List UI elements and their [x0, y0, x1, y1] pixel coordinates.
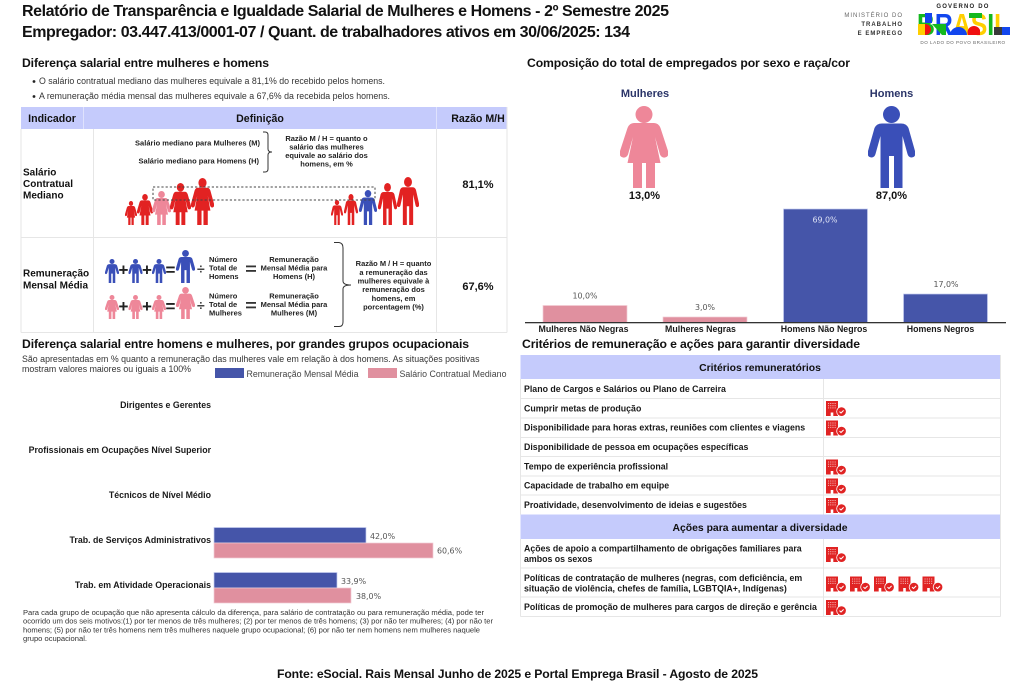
table header: Razão M/H — [451, 113, 505, 125]
bar chart: grupos ocupacionais: 38,0% — [356, 592, 382, 601]
action rows: ambos os sexos — [524, 554, 593, 564]
criteria rows: Disponibilidade de pessoa em ocupações específicas — [524, 442, 749, 452]
equation: homens: Mensal Média para — [261, 264, 328, 272]
equation: mulheres: Mulheres (M) — [271, 308, 318, 318]
bar chart: sexo e raça/cor: Homens Negros — [907, 324, 974, 334]
panel: diferença por grupos ocupacionais — [22, 337, 507, 643]
table header: Indicador — [28, 113, 76, 125]
logo: Governo do Brasil: DO LADO DO POVO BRASILEIRO — [920, 40, 1006, 45]
bar chart: sexo e raça/cor: Homens Não Negros — [781, 324, 867, 334]
logo: Governo do Brasil: GOVERNO DO — [936, 4, 990, 10]
equation: homens: Homens (H) — [273, 272, 316, 281]
icon: homens 87,0% — [868, 88, 915, 202]
equation: mulheres: ÷ — [197, 297, 205, 313]
action rows: Políticas de promoção de mulheres para cargos de direção e gerência — [524, 602, 817, 612]
header: critérios remuneratórios: Critérios remuneratórios — [699, 363, 821, 374]
table header — [21, 107, 507, 129]
bar chart: sexo e raça/cor: 3,0% — [695, 303, 716, 312]
legend: Remuneração Mensal Média — [246, 369, 359, 379]
title: Empregador: 03.447.413/0001-07 / Quant. de trabalhadores ativos em 30/06/2025: 134 — [22, 24, 630, 41]
criteria rows: Cumprir metas de produção — [524, 404, 642, 414]
equation: homens: + — [142, 260, 152, 280]
table header: Definição — [236, 113, 284, 125]
bar chart: sexo e raça/cor — [525, 209, 1006, 334]
bar chart: grupos ocupacionais: 42,0% — [370, 532, 396, 541]
criteria rows — [524, 384, 805, 510]
row: remuneração mensal média: homens, em — [372, 294, 416, 303]
category labels: Trab. em Atividade Operacionais — [75, 580, 211, 590]
equation: mulheres: + — [142, 297, 152, 316]
row: remuneração mensal média: 67,6% — [462, 281, 494, 293]
criteria rows: Disponibilidade para horas extras, reuniões com clientes e viagens — [524, 422, 805, 432]
equation: mulheres: = — [166, 297, 176, 316]
panel: composição do total de empregados — [525, 56, 1006, 334]
icon: family men — [331, 177, 419, 225]
bar chart: sexo e raça/cor: 69,0% — [812, 216, 838, 224]
row: salário contratual mediano — [23, 132, 494, 225]
equation: homens — [105, 250, 328, 283]
footnote: homens; (5) por não ter três homens nem três mulheres naquele grupo ocupacional; (6) por não ter nem homens nem mulheres naquele — [23, 626, 480, 634]
description: São apresentadas em % quanto a remuneração das mulheres vale em relação à dos homens. As situações positivas — [22, 354, 480, 364]
category labels: Dirigentes e Gerentes — [120, 400, 211, 410]
row: salário contratual mediano: homens, em % — [300, 160, 353, 168]
header: ações para aumentar a diversidade — [520, 514, 1000, 539]
row: salário contratual mediano: Contratual — [23, 179, 73, 190]
category labels — [29, 400, 212, 590]
action rows: situação de violência, chefes de família, LGBTQIA+, Indígenas) — [524, 584, 787, 594]
equation: mulheres: + — [118, 297, 128, 316]
criteria icons — [826, 401, 847, 514]
row: salário contratual mediano: equivale ao salário dos — [285, 151, 368, 160]
logo: Governo do Brasil: BRASIL — [917, 7, 1009, 42]
row: salário contratual mediano: 81,1% — [462, 179, 494, 191]
equation: homens: ÷ — [197, 260, 205, 276]
bar chart: sexo e raça/cor: 17,0% — [933, 280, 959, 289]
header: ações para aumentar a diversidade: Ações para aumentar a diversidade — [672, 523, 848, 534]
bar chart: grupos ocupacionais: 33,9% — [341, 577, 367, 586]
row: remuneração mensal média: mulheres equivale à — [358, 276, 430, 286]
equation: mulheres: Mulheres — [209, 308, 242, 318]
row: salário contratual mediano: Razão M / H = quanto o — [285, 134, 368, 143]
category labels: Técnicos de Nível Médio — [109, 490, 212, 500]
footnote: ocorrido um dos seis motivos:(1) por ter menos de três mulheres; (2) por ter menos de três homens; (3) por não ter mulheres; (4) por não ter — [23, 617, 493, 626]
bar chart: grupos ocupacionais — [214, 528, 463, 603]
action rows: Políticas de contratação de mulheres (negras, com deficiência, em — [524, 573, 802, 583]
logo: Ministério do Trabalho e Emprego: E EMPREGO — [858, 31, 903, 37]
equation: homens: = — [166, 260, 176, 280]
row: remuneração mensal média: remuneração dos — [362, 285, 425, 294]
equation: mulheres: Remuneração — [269, 292, 319, 300]
equation: homens: Número — [209, 255, 238, 264]
row: remuneração mensal média — [23, 242, 494, 326]
criteria rows: Tempo de experiência profissional — [524, 462, 668, 472]
bar chart: sexo e raça/cor: Mulheres Não Negras — [539, 324, 629, 334]
equation: mulheres: Mensal Média para — [261, 300, 328, 309]
logo: Ministério do Trabalho e Emprego: MINISTÉRIO DO — [844, 12, 903, 19]
action rows: Ações de apoio a compartilhamento de obrigações familiares para — [524, 544, 802, 554]
icon: homens 87,0%: Homens — [870, 88, 913, 100]
equation: homens: Remuneração — [269, 255, 319, 264]
icon: mulheres 13,0%: 13,0% — [629, 190, 660, 202]
summary bullets: O salário contratual mediano das mulheres equivale a 81,1% do recebido pelos homens. — [39, 76, 385, 86]
title — [22, 3, 669, 41]
icon: mulheres 13,0%: Mulheres — [621, 88, 669, 100]
heading: Diferença salarial entre mulheres e homens — [22, 56, 269, 70]
source note: Fonte: eSocial. Rais Mensal Junho de 2025 e Portal Emprega Brasil - Agosto de 2025 — [277, 667, 758, 681]
row: remuneração mensal média: Mensal Média — [23, 280, 88, 292]
row: remuneração mensal média: Remuneração — [23, 268, 89, 280]
heading: Composição do total de empregados por sexo e raça/cor — [527, 56, 850, 70]
row: salário contratual mediano: Salário mediano para Homens (H) — [138, 156, 260, 166]
equation: mulheres: Total de — [209, 300, 237, 309]
row: salário contratual mediano: Mediano — [23, 190, 64, 202]
panel: critérios de remuneração e ações — [520, 337, 1000, 616]
category labels: Profissionais em Ocupações Nível Superior — [29, 445, 212, 455]
footnote: grupo ocupacional. — [23, 634, 87, 643]
equation: homens: Total de — [209, 264, 237, 272]
row: salário contratual mediano: salário das mulheres — [289, 142, 364, 152]
bar chart: sexo e raça/cor: 10,0% — [572, 292, 598, 300]
logo: Ministério do Trabalho e Emprego: TRABALHO — [861, 22, 903, 28]
summary bullets: A remuneração média mensal das mulheres equivale a 67,6% da recebida pelos homens. — [39, 91, 390, 101]
header: critérios remuneratórios — [520, 355, 1000, 379]
legend — [215, 368, 507, 379]
description: mostram valores maiores ou iguais a 100% — [22, 364, 191, 374]
bar chart: sexo e raça/cor: Mulheres Negras — [665, 324, 736, 334]
footnote: Para cada grupo de ocupação que não apresenta cálculo da diferença, para salário de contratação ou para remuneração média, pode ter — [23, 608, 484, 617]
title: Relatório de Transparência e Igualdade Salarial de Mulheres e Homens - 2º Semestre 2025 — [22, 3, 669, 20]
heading: Diferença salarial entre homens e mulheres, por grandes grupos ocupacionais — [22, 337, 469, 351]
row: salário contratual mediano: Salário mediano para Mulheres (M) — [135, 138, 260, 148]
heading: Critérios de remuneração e ações para garantir diversidade — [522, 337, 860, 351]
category labels: Trab. de Serviços Administrativos — [70, 535, 211, 545]
action rows — [524, 544, 817, 612]
action icons — [826, 547, 943, 616]
panel: diferença salarial entre mulheres e homens — [21, 56, 507, 332]
row: remuneração mensal média: porcentagem (%) — [363, 302, 424, 312]
criteria rows: Plano de Cargos e Salários ou Plano de Carreira — [524, 384, 726, 394]
summary bullets — [33, 76, 390, 101]
logo: Ministério do Trabalho e Emprego — [844, 12, 903, 37]
row: remuneração mensal média: Razão M / H = quanto — [356, 259, 432, 268]
criteria rows: Proatividade, desenvolvimento de ideias e sugestões — [524, 500, 747, 510]
equation: homens: Homens — [209, 272, 239, 281]
icon: homens 87,0%: 87,0% — [876, 190, 907, 202]
equation: homens: + — [118, 260, 128, 280]
bar chart: grupos ocupacionais: 60,6% — [437, 546, 463, 556]
icon: family women — [125, 178, 214, 225]
equation: mulheres — [105, 287, 328, 319]
icon: mulheres 13,0% — [620, 88, 669, 202]
legend: Salário Contratual Mediano — [400, 369, 507, 379]
row: remuneração mensal média: a remuneração das — [359, 268, 428, 277]
equation: mulheres: Número — [209, 292, 238, 300]
row: salário contratual mediano: Salário — [23, 168, 56, 178]
criteria rows: Capacidade de trabalho em equipe — [524, 480, 669, 490]
